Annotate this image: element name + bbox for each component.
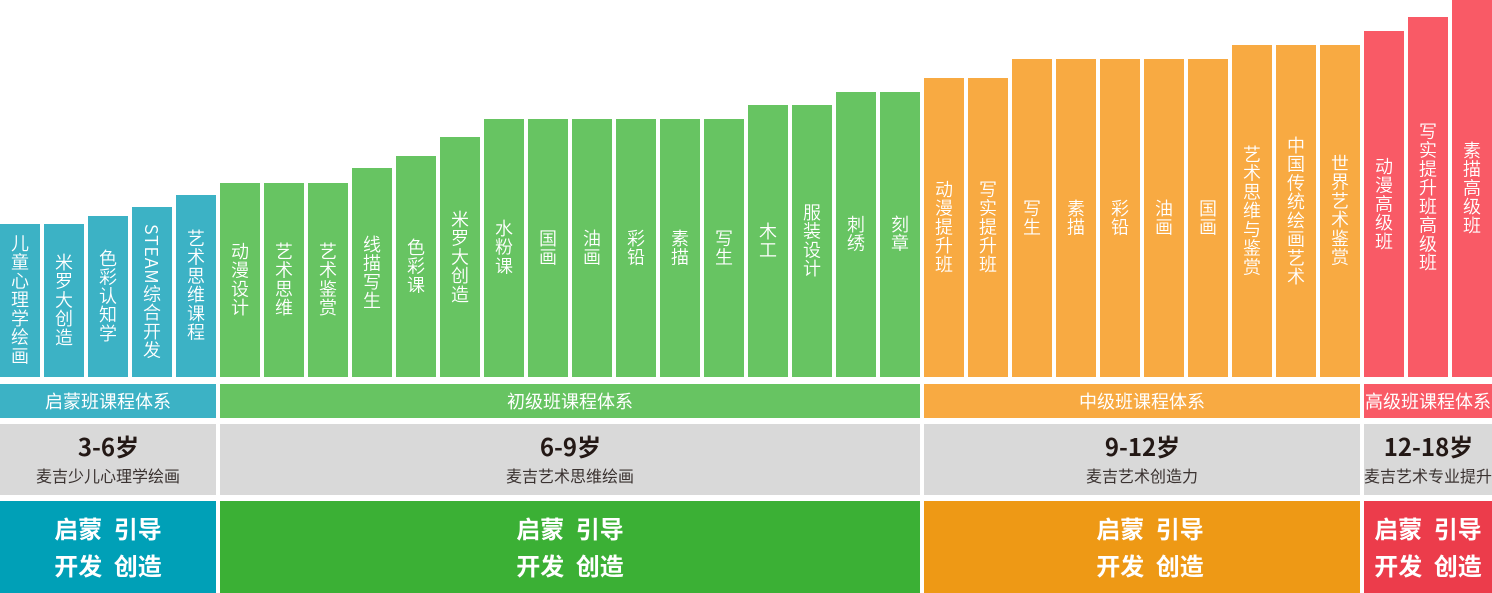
goals panel: orange: 开发 创造 <box>1096 547 1204 582</box>
goals panel: red: 开发 创造 <box>1374 547 1482 582</box>
bar: 油画 <box>572 119 612 377</box>
bar: 彩铅 <box>616 119 656 377</box>
goals panel: red <box>1364 501 1492 593</box>
goals panel: green <box>220 501 920 593</box>
bar: 写实提升班 <box>968 78 1008 377</box>
bar: 国画: 国画 <box>535 229 561 266</box>
bar: 国画 <box>1188 59 1228 377</box>
bar: 动漫高级班 <box>1364 31 1404 377</box>
age panel: 12-18岁: 麦吉艺术专业提升 <box>1364 463 1492 487</box>
bar: 写实提升班: 写实提升班 <box>975 180 1001 274</box>
bar: 水粉课 <box>484 119 524 377</box>
bar: 动漫提升班 <box>924 78 964 377</box>
heading: 初级班课程体系: 初级班课程体系 <box>507 388 633 414</box>
bar: 写生: 写生 <box>1019 199 1045 236</box>
bars: 中级班 courses <box>924 45 1360 377</box>
goals panel: teal <box>0 501 216 593</box>
bar: 服装设计 <box>792 105 832 377</box>
bar: 写生 <box>1012 59 1052 377</box>
bar: 刻章 <box>880 92 920 377</box>
bar: 世界艺术鉴赏: 世界艺术鉴赏 <box>1327 154 1353 267</box>
bar: 油画: 油画 <box>579 229 605 266</box>
bar: 世界艺术鉴赏 <box>1320 45 1360 377</box>
bar: 艺术鉴赏 <box>308 183 348 377</box>
heading: 初级班课程体系 <box>220 384 920 418</box>
bars: 初级班 courses <box>220 92 920 377</box>
bar: 米罗大创造 <box>440 137 480 377</box>
bar: 艺术思维课程: 艺术思维课程 <box>183 229 209 342</box>
age panel: 6-9岁: 6-9岁 <box>540 428 601 463</box>
goals panel: orange: 启蒙 引导 <box>1096 510 1204 545</box>
age panel: 12-18岁: 12-18岁 <box>1384 428 1473 463</box>
bar: 艺术思维与鉴赏 <box>1232 45 1272 377</box>
bar: 彩铅: 彩铅 <box>623 229 649 266</box>
bar: 艺术鉴赏: 艺术鉴赏 <box>315 242 341 317</box>
bar: 刺绣 <box>836 92 876 377</box>
heading: 中级班课程体系: 中级班课程体系 <box>1079 388 1205 414</box>
heading: 启蒙班课程体系 <box>0 384 216 418</box>
bar: 艺术思维与鉴赏: 艺术思维与鉴赏 <box>1239 145 1265 276</box>
bar: 动漫设计 <box>220 183 260 377</box>
heading: 启蒙班课程体系: 启蒙班课程体系 <box>45 388 171 414</box>
bar: 写生 <box>704 119 744 377</box>
goals panel: teal: 开发 创造 <box>54 547 162 582</box>
bar: 儿童心理学绘画 <box>0 224 40 377</box>
bar: 色彩课: 色彩课 <box>403 238 429 294</box>
bar: 素描: 素描 <box>667 229 693 266</box>
bar: 素描: 素描 <box>1063 199 1089 236</box>
bar: 儿童心理学绘画: 儿童心理学绘画 <box>7 234 33 366</box>
bar: 油画 <box>1144 59 1184 377</box>
age panel: 3-6岁 <box>0 424 216 495</box>
goals panel: teal: 启蒙 引导 <box>54 510 162 545</box>
bar: 动漫提升班: 动漫提升班 <box>931 180 957 274</box>
bar: 色彩课 <box>396 156 436 377</box>
bars: 高级班 courses <box>1364 0 1492 377</box>
heading: 中级班课程体系 <box>924 384 1360 418</box>
age panel: 6-9岁: 麦吉艺术思维绘画 <box>506 463 634 487</box>
bar: 动漫高级班: 动漫高级班 <box>1371 157 1397 250</box>
bar: 米罗大创造 <box>44 224 84 377</box>
bar: 素描高级班 <box>1452 0 1492 377</box>
bar: 写实提升班高级班: 写实提升班高级班 <box>1415 122 1441 272</box>
bar: 彩铅: 彩铅 <box>1107 199 1133 236</box>
goals panel: red: 启蒙 引导 <box>1374 510 1482 545</box>
age panel: 9-12岁 <box>924 424 1360 495</box>
goals panel: green: 开发 创造 <box>516 547 624 582</box>
bar: 米罗大创造: 米罗大创造 <box>51 253 77 347</box>
bar: 中国传统绘画艺术 <box>1276 45 1316 377</box>
bar: 油画: 油画 <box>1151 199 1177 236</box>
bar: 木工 <box>748 105 788 377</box>
bar: 素描 <box>1056 59 1096 377</box>
goals panel: green: 启蒙 引导 <box>516 510 624 545</box>
bar: 国画 <box>528 119 568 377</box>
bar: 艺术思维 <box>264 183 304 377</box>
age panel: 6-9岁 <box>220 424 920 495</box>
bar: STEAM综合开发: STEAM综合开发 <box>139 224 165 359</box>
bar: STEAM综合开发 <box>132 207 172 377</box>
bar: 米罗大创造: 米罗大创造 <box>447 210 473 303</box>
bar: 艺术思维: 艺术思维 <box>271 242 297 317</box>
bar: 木工: 木工 <box>755 222 781 259</box>
goals panel: orange <box>924 501 1360 593</box>
bar: 素描 <box>660 119 700 377</box>
age panel: 3-6岁: 麦吉少儿心理学绘画 <box>36 463 180 487</box>
bar: 动漫设计: 动漫设计 <box>227 242 253 317</box>
bar: 艺术思维课程 <box>176 195 216 377</box>
age panel: 9-12岁: 9-12岁 <box>1105 428 1180 463</box>
bar: 色彩认知学: 色彩认知学 <box>95 249 121 343</box>
age panel: 3-6岁: 3-6岁 <box>78 428 139 463</box>
heading: 高级班课程体系: 高级班课程体系 <box>1365 388 1491 414</box>
bar: 线描写生: 线描写生 <box>359 234 385 310</box>
bar: 刺绣: 刺绣 <box>843 215 869 253</box>
bar: 彩铅 <box>1100 59 1140 377</box>
age panel: 9-12岁: 麦吉艺术创造力 <box>1086 463 1198 487</box>
bar: 素描高级班: 素描高级班 <box>1459 141 1485 235</box>
bar: 服装设计: 服装设计 <box>799 203 825 278</box>
age panel: 12-18岁 <box>1364 424 1492 495</box>
bar: 中国传统绘画艺术: 中国传统绘画艺术 <box>1283 136 1309 286</box>
bar: 写实提升班高级班 <box>1408 17 1448 377</box>
bar: 刻章: 刻章 <box>887 215 913 253</box>
bar: 色彩认知学 <box>88 216 128 377</box>
bar: 写生: 写生 <box>711 229 737 266</box>
bars: 启蒙班 courses <box>0 195 216 377</box>
bar: 线描写生 <box>352 168 392 377</box>
bar: 水粉课: 水粉课 <box>491 219 517 276</box>
bar: 国画: 国画 <box>1195 199 1221 236</box>
